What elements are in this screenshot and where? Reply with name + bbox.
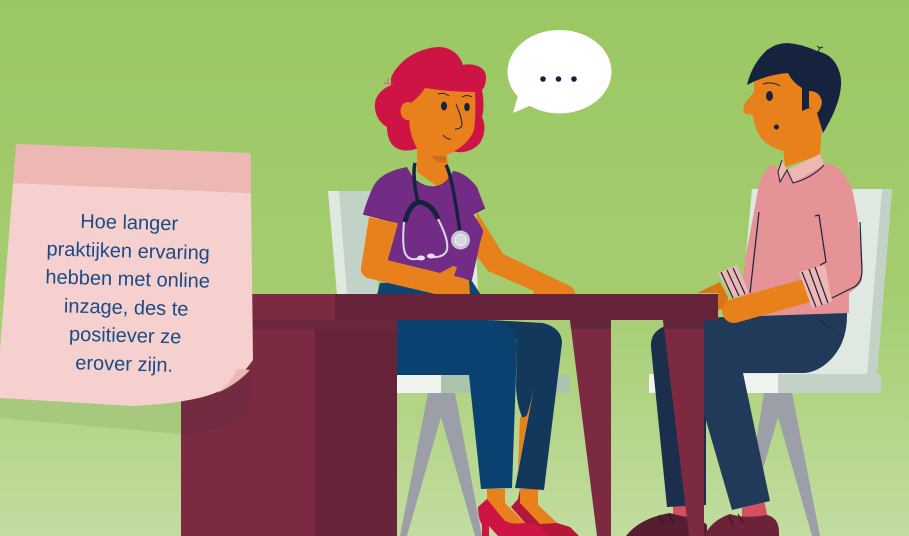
near arm — [361, 217, 470, 295]
trouser crease — [817, 316, 834, 330]
waist — [377, 278, 481, 295]
near cuff — [799, 265, 832, 308]
stethoscope — [403, 163, 470, 260]
far shoe and sock — [626, 505, 707, 536]
note text: positiever ze — [69, 324, 182, 348]
face — [409, 88, 475, 156]
table leg right — [663, 320, 704, 536]
doctor figure — [361, 47, 579, 536]
near leg — [700, 312, 847, 510]
hair — [747, 43, 841, 133]
neck and head — [783, 125, 822, 167]
neck — [417, 145, 450, 188]
sticky note — [0, 144, 253, 406]
panel shadow — [252, 320, 397, 329]
table leg left — [570, 320, 611, 536]
note top band — [13, 144, 251, 193]
desk top — [335, 294, 718, 320]
sweater — [740, 163, 862, 316]
facial features — [763, 83, 780, 130]
ear — [400, 102, 416, 120]
far hand — [697, 282, 728, 310]
note text: erover zijn. — [75, 352, 173, 377]
note body — [0, 183, 253, 406]
folded corner — [217, 369, 250, 393]
face — [743, 62, 825, 151]
collar — [778, 154, 824, 183]
sweater lines — [750, 212, 862, 298]
desk side panel — [315, 320, 397, 536]
patient figure — [626, 43, 862, 536]
ear — [809, 91, 822, 114]
desk — [181, 294, 718, 536]
leg shadows — [570, 320, 611, 329]
hair tuft — [817, 46, 823, 52]
hair strand — [384, 78, 393, 84]
desk top light — [252, 294, 335, 320]
near sock and shoe — [704, 501, 779, 536]
far arm — [476, 212, 576, 294]
sticky note shadow on background — [0, 398, 181, 434]
note text: Hoe langer — [80, 211, 179, 235]
far leg and shoe — [490, 320, 579, 536]
desk drawer panel — [181, 294, 315, 536]
note text — [45, 211, 210, 377]
hair back — [375, 47, 486, 152]
note text: praktijken ervaring — [46, 238, 210, 265]
patient's chair — [649, 189, 892, 536]
sticky note shadow on desk — [181, 370, 250, 434]
doctor's chair — [328, 191, 570, 536]
near forearm — [734, 291, 805, 311]
note text: inzage, des te — [64, 295, 189, 321]
note text: hebben met online — [45, 266, 210, 293]
shirt — [363, 167, 485, 280]
patient leg shadow — [663, 320, 704, 329]
far cuff — [718, 265, 749, 298]
far leg — [651, 320, 706, 507]
speech bubble — [508, 30, 612, 113]
face details — [438, 93, 472, 139]
near leg and shoe — [385, 320, 547, 536]
